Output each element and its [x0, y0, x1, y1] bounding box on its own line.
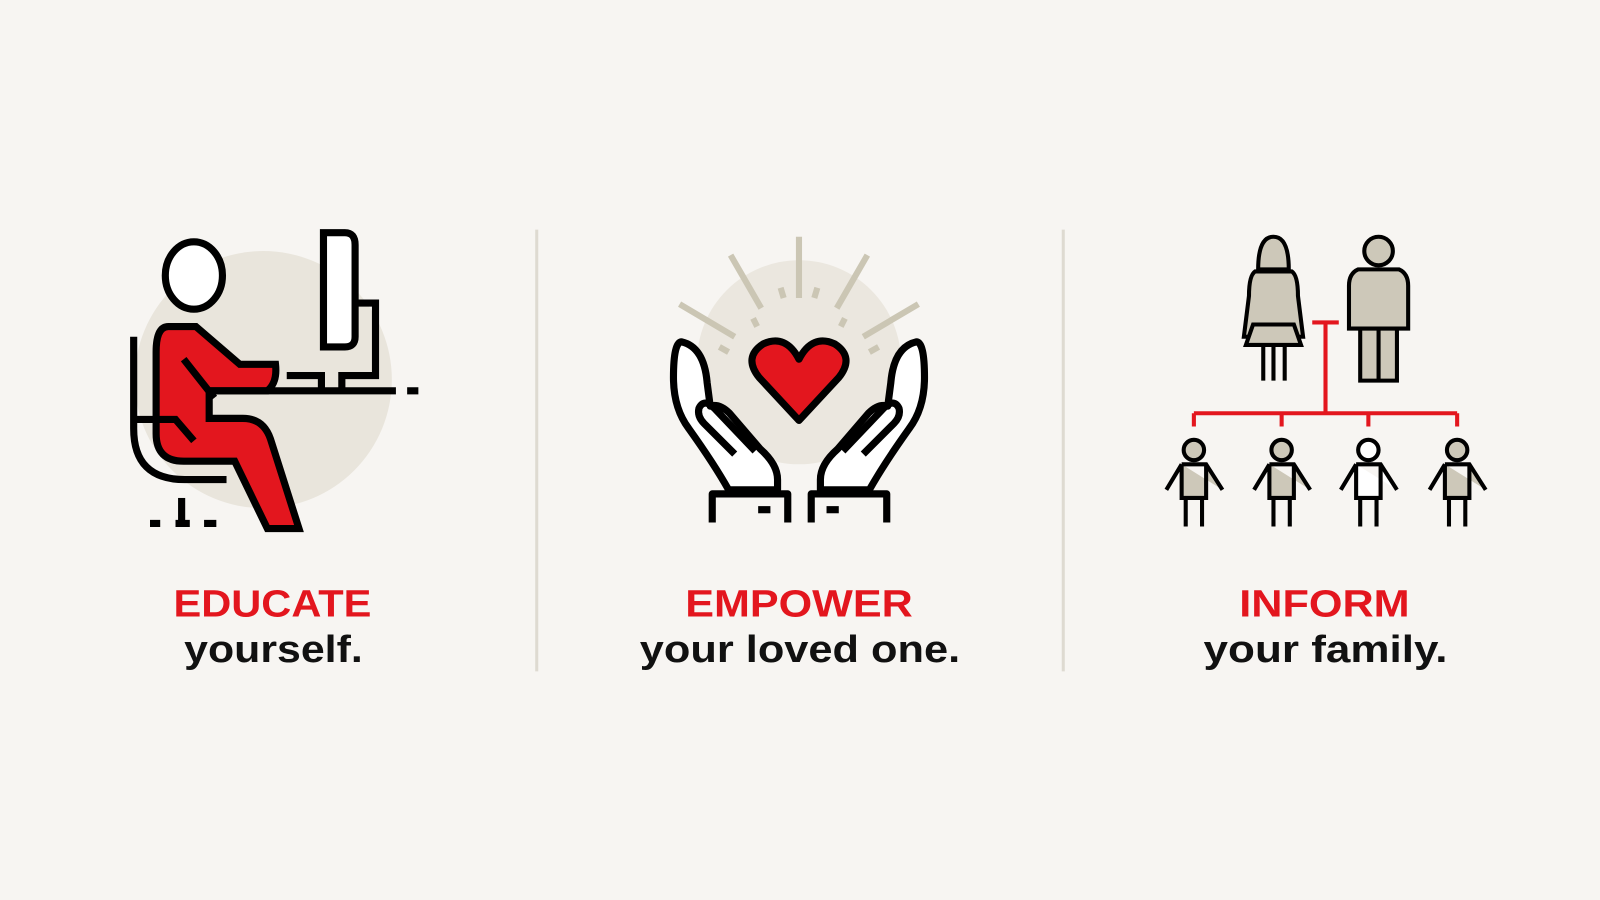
man — [1364, 237, 1393, 265]
woman — [1258, 237, 1289, 269]
heading: inform: your family. — [1204, 628, 1447, 670]
heading: inform — [1204, 582, 1447, 670]
heading: empower — [640, 582, 960, 670]
heading: educate: EDUCATE — [173, 582, 371, 624]
body — [156, 327, 299, 529]
icon: person at computer — [134, 233, 418, 529]
monitor — [323, 233, 355, 347]
heading: inform: INFORM — [1239, 582, 1410, 624]
children — [1166, 440, 1486, 527]
heading: educate — [173, 582, 371, 670]
heading: empower: your loved one. — [640, 628, 960, 670]
heading: educate: yourself. — [184, 628, 363, 670]
chair — [134, 337, 227, 480]
icon: hands holding heart — [673, 237, 924, 522]
head — [165, 242, 222, 309]
heading: empower: EMPOWER — [685, 582, 913, 624]
icon: family tree — [1166, 237, 1486, 527]
